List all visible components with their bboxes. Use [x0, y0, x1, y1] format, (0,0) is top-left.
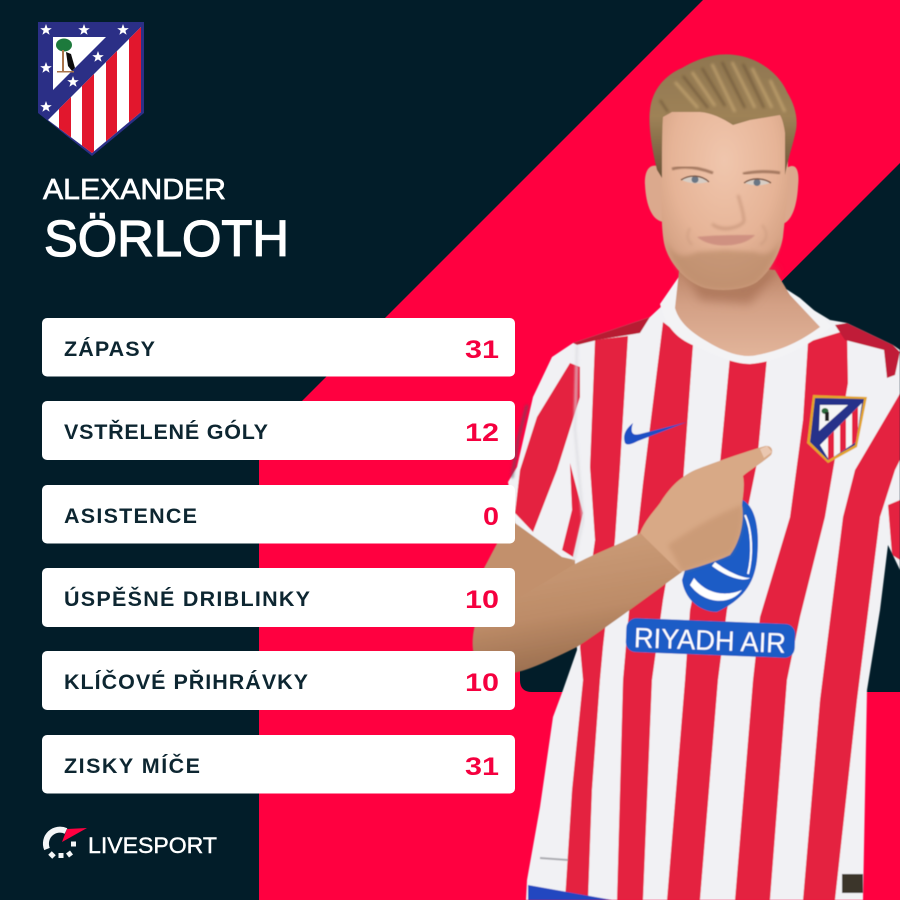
shorts	[528, 885, 612, 900]
stat row: matches	[42, 318, 515, 376]
dark red shoulders	[573, 317, 650, 345]
stat row: dribbles: ÚSPĚŠNÉ DRIBLINKY	[64, 586, 310, 611]
stat row: key passes: KLÍČOVÉ PŘIHRÁVKY	[64, 669, 308, 694]
crest stars	[40, 24, 129, 112]
stat row: key passes: 10	[465, 669, 499, 697]
stat row: key passes	[42, 651, 515, 710]
crest white triangle	[53, 37, 106, 90]
player first name: ALEXANDER	[43, 174, 226, 206]
crest stripes	[48, 27, 141, 153]
stat row: matches: 31	[465, 336, 499, 364]
hand	[640, 446, 772, 572]
fingernail	[760, 446, 772, 458]
stat row: assists	[42, 485, 515, 544]
shirt crest	[806, 394, 868, 464]
crest tree and bear	[56, 38, 75, 72]
upper arm	[480, 515, 585, 668]
stat row: ball recoveries: ZISKY MÍČE	[64, 753, 200, 778]
eyebrows	[672, 167, 780, 174]
knuckle shade	[668, 505, 743, 572]
logo icon	[46, 828, 87, 858]
Livesport logo	[46, 828, 217, 858]
player photo	[473, 54, 900, 900]
nike swoosh	[624, 422, 687, 444]
logo wordmark: LIVESPORT	[88, 833, 217, 858]
forearm	[473, 533, 682, 674]
face	[661, 88, 788, 290]
stat row: dribbles: 10	[465, 586, 499, 614]
red diagonal background shape	[259, 0, 900, 900]
sponsor badge: Riyadh Air: RIYADH AIR	[633, 622, 786, 659]
stat row: goals: 12	[465, 419, 499, 447]
shirt	[508, 275, 900, 900]
sleeve seam shading	[574, 345, 583, 560]
mouth	[697, 235, 755, 245]
collar	[660, 275, 832, 364]
stat row: goals	[42, 401, 515, 460]
stubble	[666, 238, 781, 290]
stat row: ball recoveries: 31	[465, 753, 499, 781]
neck	[675, 262, 820, 356]
shirt tag	[842, 874, 863, 893]
stat row: dribbles	[42, 568, 515, 627]
player surname: SÖRLOTH	[44, 210, 289, 267]
stat row: goals: VSTŘELENÉ GÓLY	[64, 419, 268, 444]
stat row: matches: ZÁPASY	[64, 336, 155, 361]
ears	[645, 166, 798, 224]
stat row: assists: ASISTENCE	[64, 504, 197, 528]
stat row: assists: 0	[483, 503, 499, 531]
neck shadow	[680, 262, 778, 304]
smile cheek lines	[688, 225, 766, 245]
dark lower-right background panel	[520, 163, 900, 692]
sponsor circle logo	[682, 500, 758, 612]
club crest	[38, 20, 148, 160]
sleeve patch	[512, 405, 527, 478]
eyes	[681, 176, 771, 186]
stat row: ball recoveries	[42, 735, 515, 794]
shirt small print	[540, 858, 568, 860]
hair	[649, 54, 797, 178]
nose	[712, 195, 744, 229]
crest shield	[38, 22, 144, 156]
